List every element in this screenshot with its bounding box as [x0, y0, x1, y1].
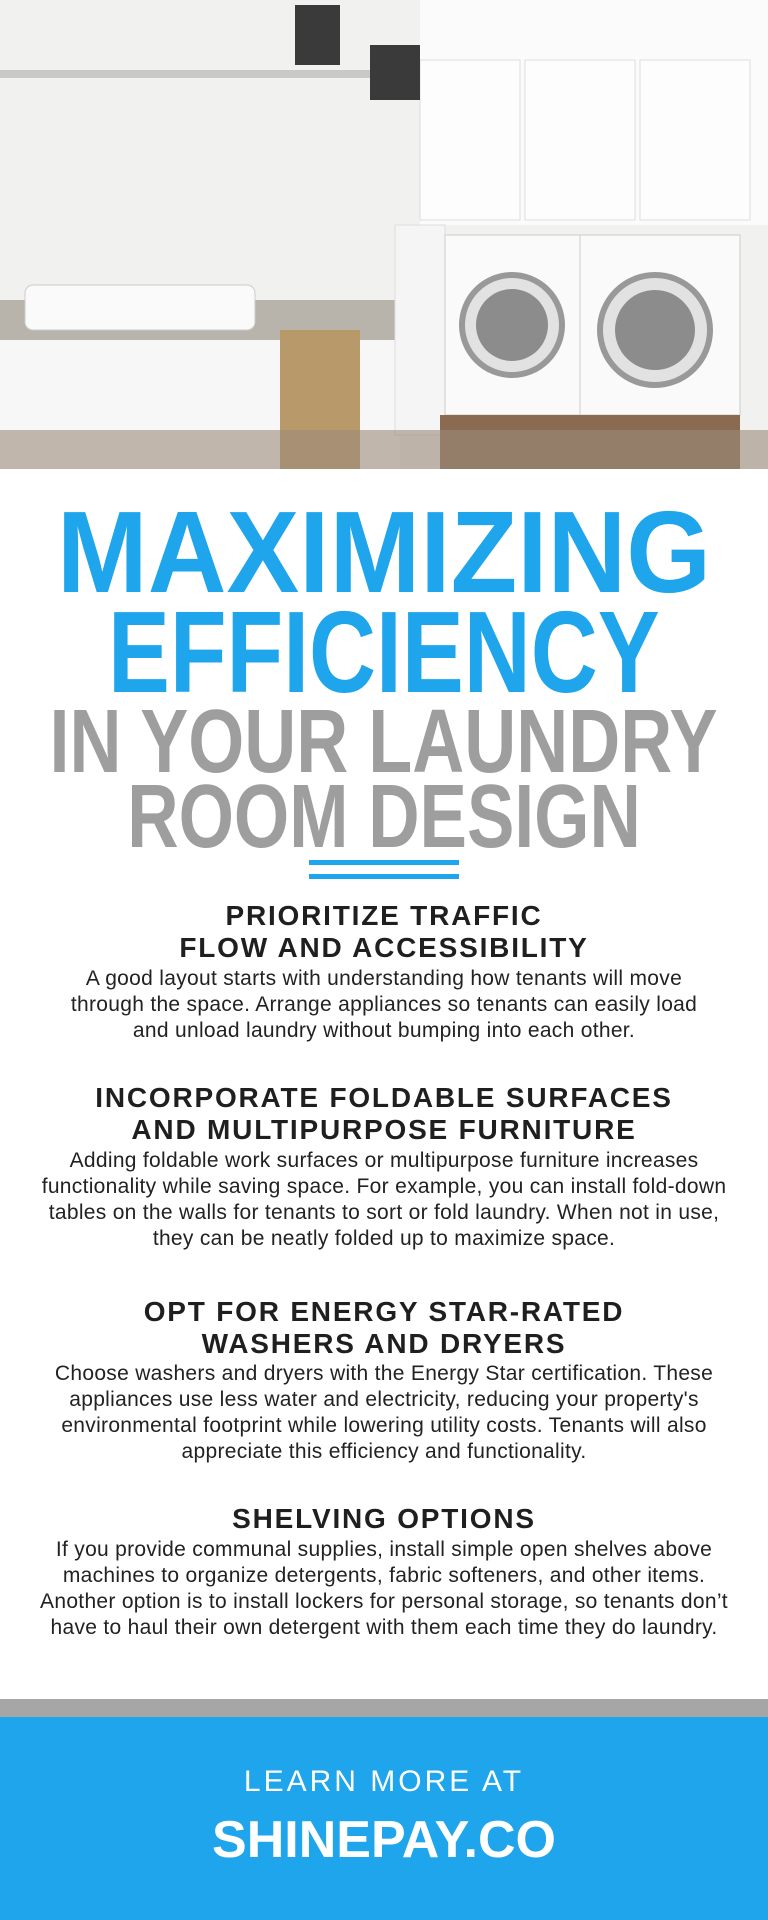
heading 2: [95, 1082, 673, 1145]
gray bar: [0, 1699, 768, 1717]
heading 1: PRIORITIZE TRAFFIC: [225, 900, 543, 931]
heading 2: AND MULTIPURPOSE FURNITURE: [131, 1114, 637, 1145]
heading 1: FLOW AND ACCESSIBILITY: [179, 932, 589, 963]
footer: [0, 1717, 768, 1920]
body 3: Choose washers and dryers with the Energy Star certification. These appliances use less water and electricity, reducing your property's environmental footprint while lowering utility costs. Tenants will also appreciate this efficiency and functionality.: [55, 1362, 713, 1463]
heading 2: INCORPORATE FOLDABLE SURFACES: [95, 1082, 673, 1113]
divider lines: [309, 860, 459, 879]
photo: laundry room: [0, 0, 768, 469]
title: [50, 487, 718, 867]
heading 4: SHELVING OPTIONS: [232, 1503, 536, 1534]
body 2: Adding foldable work surfaces or multipurpose furniture increases functionality while saving space. For example, you can install fold-down tables on the walls for tenants to sort or fold laundry. When not in use, they can be neatly folded up to maximize space.: [42, 1149, 726, 1250]
title: IN YOUR LAUNDRY: [50, 692, 718, 792]
heading 3: OPT FOR ENERGY STAR-RATED: [144, 1296, 624, 1327]
heading 3: WASHERS AND DRYERS: [202, 1328, 566, 1359]
heading 1: [179, 900, 589, 963]
title: ROOM DESIGN: [127, 767, 641, 867]
title: EFFICIENCY: [108, 587, 660, 717]
footer text: url: SHINEPAY.CO: [212, 1811, 556, 1869]
body 4: If you provide communal supplies, install simple open shelves above machines to organize detergents, fabric softeners, and other items. Another option is to install lockers for personal storage, so tenants don’t have to haul their own detergent with them each time they do laundry.: [40, 1538, 728, 1639]
heading 3: [144, 1296, 624, 1359]
body 1: A good layout starts with understanding how tenants will move through the space. Arrange appliances so tenants can easily load and unload laundry without bumping into each other.: [71, 967, 697, 1042]
footer text: learn more: LEARN MORE AT: [244, 1765, 524, 1798]
title: MAXIMIZING: [57, 487, 711, 617]
